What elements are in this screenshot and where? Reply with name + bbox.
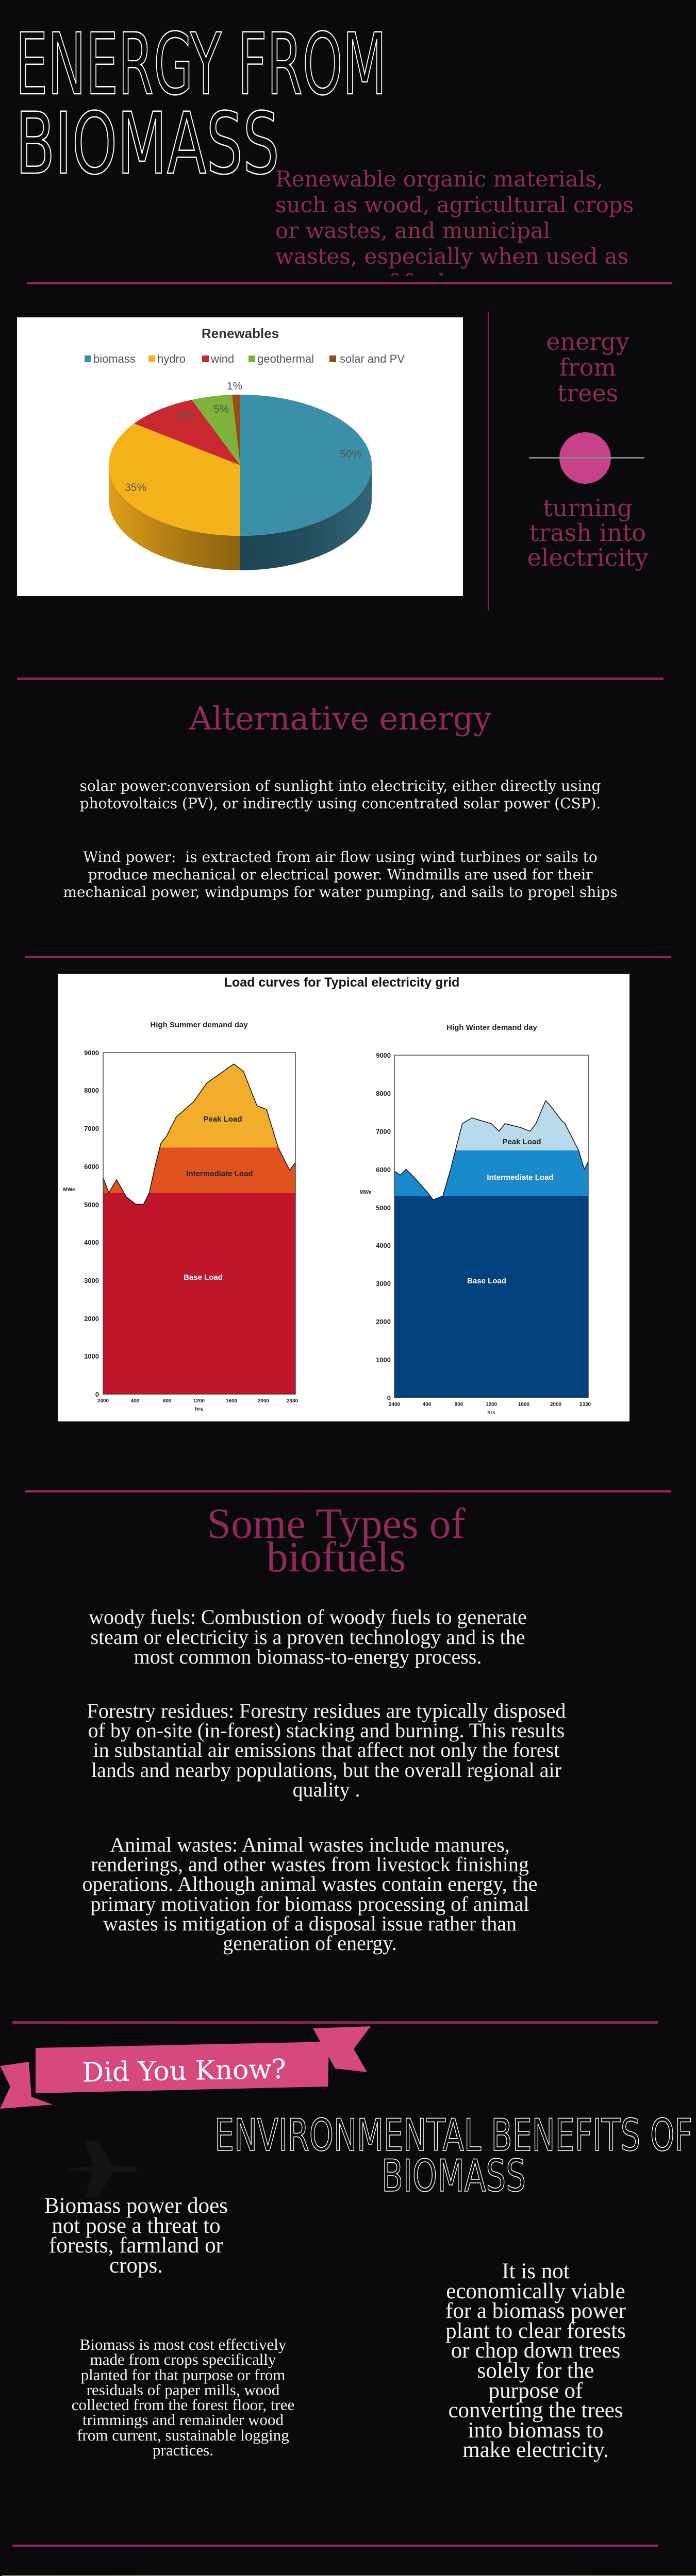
text: not economically viable: converting the trees <box>448 2398 623 2422</box>
heading: some types of biofuels: biofuels <box>267 1533 406 1581</box>
banner: did you know <box>0 2026 371 2109</box>
intro description: or wastes, and municipal <box>275 218 550 243</box>
text: not economically viable: purpose of <box>489 2379 583 2403</box>
text: biomass cost effective: trimmings and remainder wood <box>82 2411 284 2429</box>
title <box>15 21 387 185</box>
turning trash caption <box>527 494 649 571</box>
pie chart: renewables: 50% <box>340 448 361 460</box>
pie chart: renewables: 35% <box>125 482 146 494</box>
text: wind power <box>63 849 618 901</box>
text: not economically viable: or chop down trees <box>451 2338 620 2363</box>
heading: some types of biofuels: Some Types of <box>207 1500 466 1548</box>
chart: load curves: 800 <box>455 1402 463 1408</box>
intro description <box>275 166 634 276</box>
text: biomass cost effective: from current, sustainable logging <box>77 2426 289 2444</box>
chart: load curves: 0 <box>387 1394 391 1402</box>
text: not economically viable <box>445 2259 626 2462</box>
chart: load curves: 9000 <box>84 1049 99 1057</box>
text: not economically viable: make electricity. <box>462 2438 609 2462</box>
energy from trees caption <box>546 328 629 407</box>
text: biomass power does not pose threat: not pose a threat to <box>52 2214 221 2238</box>
text: animal wastes: Animal wastes: Animal wastes include manures, <box>110 1833 510 1856</box>
text: forestry residues: lands and nearby populations, but the overall regional air <box>91 1758 561 1782</box>
chart: load curves <box>58 974 629 1421</box>
pie chart: renewables: 9% <box>178 410 193 422</box>
text: animal wastes: primary motivation for biomass processing of animal <box>91 1892 529 1916</box>
pie chart: renewables: Renewables <box>202 326 279 341</box>
chart: load curves: 2400 <box>389 1402 401 1408</box>
energy from trees caption: energy <box>546 328 629 355</box>
turning trash caption: trash into <box>529 519 646 547</box>
text: biomass power does not pose threat: forests, farmland or <box>49 2233 223 2258</box>
pie chart: renewables: wind <box>210 352 234 365</box>
text: biomass power does not pose threat: Biomass power does <box>44 2194 228 2218</box>
text: forestry residues: of by on-site (in-forest) stacking and burning. This results <box>88 1719 565 1742</box>
chart: load curves: 2000 <box>258 1398 270 1404</box>
chart: load curves: 2330 <box>287 1398 299 1404</box>
chart: load curves: 4000 <box>376 1242 391 1249</box>
chart: load curves: 6000 <box>376 1166 391 1174</box>
chart: load curves: 1200 <box>193 1398 205 1404</box>
chart: load curves: MWe <box>63 1187 75 1193</box>
text: woody fuels: woody fuels: Combustion of woody fuels to generate <box>89 1605 527 1629</box>
chart: load curves: hrs <box>487 1410 495 1416</box>
text: wind power: Wind power: is extracted from air flow using wind turbines or sails to <box>83 849 598 866</box>
chart: load curves: High Winter demand day <box>446 1023 538 1032</box>
text: animal wastes: renderings, and other wastes from livestock finishing <box>91 1853 529 1876</box>
chart: load curves: High Summer demand day <box>150 1021 248 1029</box>
pie chart: renewables: hydro <box>157 352 186 365</box>
turning trash caption: turning <box>543 494 633 522</box>
text: animal wastes: generation of energy. <box>223 1931 397 1955</box>
chart: load curves: Peak Load <box>502 1138 541 1146</box>
text: not economically viable: It is not <box>502 2259 570 2283</box>
chart: load curves: Load curves for Typical electricity grid <box>224 975 459 990</box>
text: wind power: produce mechanical or electrical power. Windmills are used for their <box>88 866 593 883</box>
text: woody fuels: steam or electricity is a proven technology and is the <box>90 1625 525 1649</box>
chart: load curves: 2000 <box>84 1315 99 1323</box>
chart: load curves: 9000 <box>376 1052 391 1059</box>
text: not economically viable: plant to clear forests <box>445 2319 626 2343</box>
text: not economically viable: into biomass to <box>468 2418 603 2443</box>
pie chart: renewables: 5% <box>213 403 229 415</box>
banner: did you know: Did You Know? <box>82 2054 286 2088</box>
text: biomass cost effective: collected from the forest floor, tree <box>72 2396 294 2414</box>
text: animal wastes: wastes is mitigation of a disposal issue rather than <box>103 1912 517 1935</box>
chart: load curves: Base Load <box>184 1273 223 1282</box>
intro description: such as wood, agricultural crops <box>275 192 634 217</box>
turning trash caption: electricity <box>527 544 649 571</box>
text: biomass cost effective: made from crops specifically <box>90 2350 276 2368</box>
pie chart: renewables: biomass <box>93 352 136 365</box>
chart: load curves: MWe <box>359 1190 372 1195</box>
chart: load curves: 7000 <box>84 1125 99 1132</box>
text: biomass power does not pose threat <box>44 2194 228 2278</box>
chart: load curves: 2400 <box>97 1398 109 1404</box>
text: animal wastes: operations. Although animal wastes contain energy, the <box>82 1872 538 1895</box>
text: not economically viable: solely for the <box>477 2359 594 2383</box>
text: not economically viable: economically viable <box>446 2279 625 2303</box>
text: biomass cost effective <box>72 2335 294 2459</box>
chart: load curves: Intermediate Load <box>186 1170 253 1178</box>
chart: load curves: Peak Load <box>203 1115 242 1124</box>
pie chart: renewables: 1% <box>227 380 242 392</box>
chart: load curves: 2330 <box>579 1402 591 1408</box>
text: biomass power does not pose threat: crops. <box>109 2253 163 2278</box>
chart: load curves: 1600 <box>518 1402 530 1408</box>
chart: load curves: 6000 <box>84 1163 99 1171</box>
text: solar power: photovoltaics (PV), or indirectly using concentrated solar power (CSP). <box>80 795 601 812</box>
text: woody fuels: most common biomass-to-energy process. <box>134 1645 482 1668</box>
chart: load curves: 2000 <box>376 1318 391 1326</box>
text: woody fuels <box>89 1605 527 1668</box>
chart: load curves: 1000 <box>376 1356 391 1364</box>
diagram: biomass sources <box>2 2575 696 2576</box>
chart: load curves: 7000 <box>376 1128 391 1136</box>
text: biomass cost effective: planted for that purpose or from <box>81 2366 285 2384</box>
text: forestry residues: Forestry residues: Forestry residues are typically disposed <box>87 1699 566 1722</box>
chart: load curves: 1000 <box>84 1352 99 1360</box>
chart: load curves: 5000 <box>376 1204 391 1212</box>
energy from trees caption: from <box>559 353 616 381</box>
text: animal wastes <box>82 1833 538 1955</box>
pie chart: renewables <box>17 317 463 596</box>
text: forestry residues <box>87 1699 566 1801</box>
text: solar power <box>80 777 601 812</box>
text: biomass cost effective: Biomass is most cost effectively <box>80 2335 286 2353</box>
intro description: wastes, especially when used as <box>275 244 628 269</box>
intro description: Renewable organic materials, <box>275 166 603 192</box>
heading: environmental benefits <box>214 2112 692 2200</box>
summer plot <box>103 1049 295 1394</box>
chart: load curves: 400 <box>423 1402 432 1408</box>
chart: load curves: hrs <box>195 1406 203 1412</box>
chart: load curves: 1200 <box>486 1402 498 1408</box>
text: not economically viable: for a biomass power <box>445 2299 626 2323</box>
chart: load curves: Intermediate Load <box>487 1173 554 1182</box>
chart: load curves: Base Load <box>467 1277 506 1285</box>
pie chart: renewables: solar and PV <box>340 352 405 365</box>
chart: load curves: 3000 <box>376 1280 391 1287</box>
chart: load curves: 400 <box>131 1398 140 1404</box>
chart: load curves: 3000 <box>84 1277 99 1284</box>
chart: load curves: 800 <box>163 1398 172 1404</box>
heading: alternative energy: Alternative energy <box>189 700 491 737</box>
heading: some types of biofuels <box>207 1500 466 1581</box>
chart: load curves: 8000 <box>376 1090 391 1097</box>
text: biomass cost effective: practices. <box>153 2441 213 2459</box>
icon: circle with line <box>529 432 644 484</box>
chart: load curves: 0 <box>95 1391 99 1398</box>
chart: load curves: 2000 <box>550 1402 562 1408</box>
text: forestry residues: in substantial air emissions that affect not only the forest <box>93 1738 559 1761</box>
chart: load curves: 8000 <box>84 1087 99 1094</box>
chart: load curves: 5000 <box>84 1201 99 1209</box>
chart: load curves: 4000 <box>84 1239 99 1246</box>
energy from trees caption: trees <box>557 379 618 407</box>
text: biomass cost effective: residuals of paper mills, wood <box>87 2381 279 2399</box>
chart: load curves: 1600 <box>226 1398 238 1404</box>
text: wind power: mechanical power, windpumps for water pumping, and sails to propel ships <box>63 884 618 901</box>
pie chart: renewables: geothermal <box>257 352 314 365</box>
text: solar power: solar power:conversion of sunlight into electricity, either directly using <box>80 777 601 794</box>
icon: plane (faint) <box>67 2141 136 2197</box>
text: forestry residues: quality . <box>292 1778 360 1801</box>
winter plot <box>394 1052 588 1398</box>
